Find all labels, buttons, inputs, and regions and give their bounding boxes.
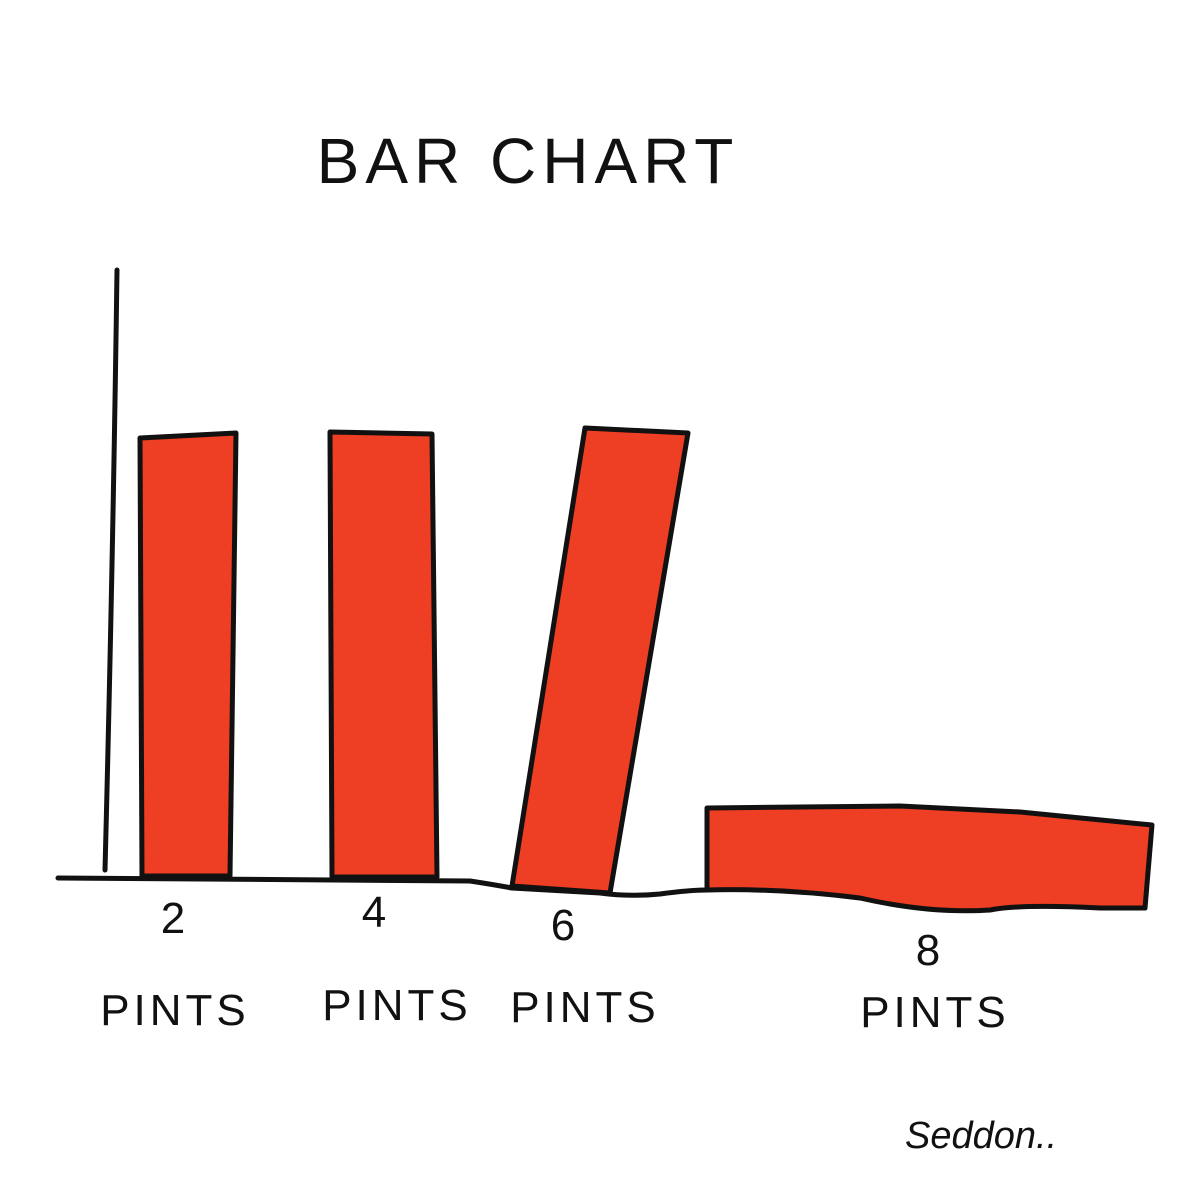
label: 4 pints: 4 bbox=[362, 888, 386, 937]
bar: 2 pints bbox=[140, 433, 236, 876]
label: 2 pints: PINTS bbox=[100, 986, 250, 1035]
label: 6 pints bbox=[510, 901, 660, 1032]
bar: 6 pints (tilted) bbox=[512, 428, 688, 893]
label: 8 pints bbox=[860, 926, 1010, 1037]
signature: Seddon.. bbox=[905, 1115, 1057, 1157]
label: 8 pints: PINTS bbox=[860, 988, 1010, 1037]
label: 8 pints: 8 bbox=[916, 926, 940, 975]
x axis baseline bbox=[58, 878, 707, 895]
label: 4 pints bbox=[322, 888, 472, 1030]
label: 6 pints: 6 bbox=[551, 901, 575, 950]
title: BAR CHART bbox=[317, 125, 739, 197]
label: 6 pints: PINTS bbox=[510, 983, 660, 1032]
label: 2 pints bbox=[100, 894, 250, 1035]
bar: 4 pints bbox=[330, 432, 437, 877]
label: 4 pints: PINTS bbox=[322, 981, 472, 1030]
y axis bbox=[105, 270, 117, 870]
label: 2 pints: 2 bbox=[161, 894, 185, 943]
bar: 8 pints (fallen) bbox=[707, 806, 1152, 911]
